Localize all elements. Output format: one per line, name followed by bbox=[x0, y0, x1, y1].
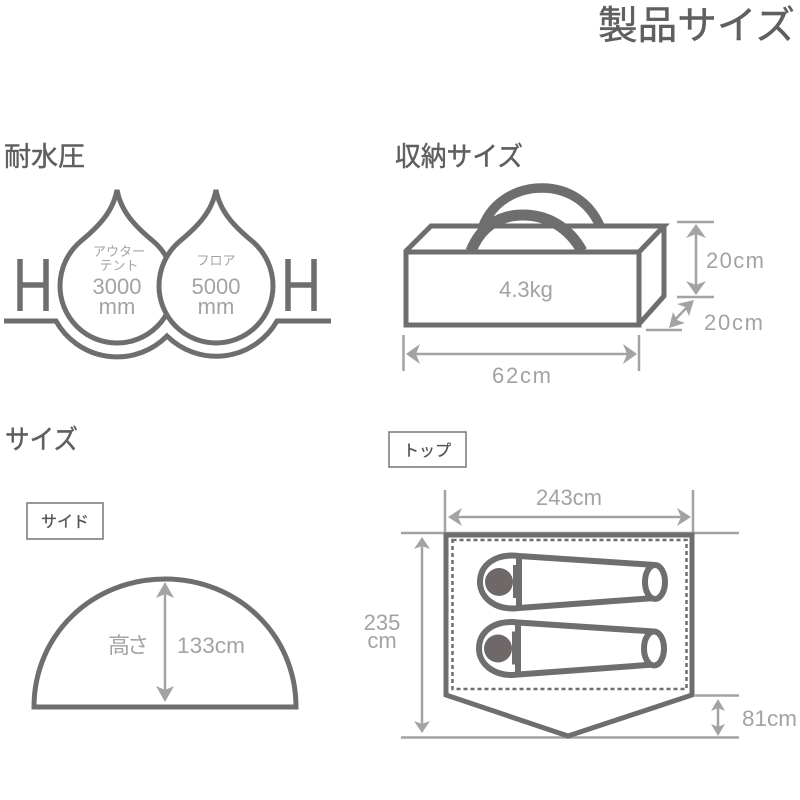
dimension: height bbox=[677, 222, 764, 297]
icon: inner tent dotted outline bbox=[452, 540, 686, 689]
label: top tag bbox=[389, 432, 466, 467]
title: 製品サイズ bbox=[598, 5, 795, 48]
dimension: length arrow: 235 bbox=[364, 610, 400, 635]
icon: sleeping bag lower bbox=[479, 620, 664, 676]
dimension: width: 62cm bbox=[492, 363, 551, 388]
icon: front handle bbox=[471, 215, 582, 251]
panel: water pressure diagram bbox=[4, 190, 331, 357]
dimension: length arrow: cm bbox=[367, 628, 397, 653]
icon: back handle bbox=[483, 188, 600, 226]
icon: bag front bbox=[406, 252, 639, 325]
label: floor: mm bbox=[198, 294, 234, 319]
label: outer tent: 3000 bbox=[93, 274, 141, 299]
icon: letter H right bbox=[288, 259, 314, 311]
icon: sleeping bag upper bbox=[480, 554, 665, 610]
dimension: vestibule arrow: 81cm bbox=[742, 706, 797, 731]
dimension: width bbox=[404, 335, 639, 388]
label: floor: 5000 bbox=[192, 274, 240, 299]
label: weight: 4.3kg bbox=[499, 277, 553, 302]
dimension: width arrow bbox=[448, 485, 691, 526]
label: outer tent: アウター bbox=[93, 244, 145, 259]
panel: top view bbox=[364, 432, 797, 738]
label: side tag bbox=[27, 503, 103, 539]
icon: floor drop bbox=[159, 190, 273, 343]
dimension: height: 20cm bbox=[706, 248, 764, 273]
dimension: vestibule arrow bbox=[711, 699, 797, 736]
dimension: length arrow bbox=[364, 537, 430, 733]
icon: letter H left bbox=[20, 259, 46, 311]
heading: size: サイズ bbox=[5, 425, 78, 455]
label: outer tent: mm bbox=[99, 294, 135, 319]
heading: water pressure: 耐水圧 bbox=[4, 142, 85, 172]
dimension: height arrow bbox=[156, 582, 174, 702]
icon: water line bbox=[4, 321, 331, 357]
icon: outer tent drop bbox=[60, 190, 174, 343]
icon: bag top and side bbox=[406, 226, 664, 323]
label: floor: フロア bbox=[196, 253, 236, 268]
label: outer tent bbox=[93, 244, 145, 319]
dimension: width arrow: 243cm bbox=[536, 485, 602, 510]
label: floor bbox=[192, 253, 240, 319]
dimension: depth: 20cm bbox=[704, 310, 763, 335]
heading: packed size: 収納サイズ bbox=[395, 142, 523, 172]
icon: tent outline bbox=[446, 535, 692, 736]
dimension: reference lines bbox=[401, 490, 739, 738]
label: height word: 高さ bbox=[108, 633, 149, 658]
dimension: depth bbox=[646, 300, 763, 335]
icon: tent dome bbox=[34, 579, 296, 707]
label: outer tent: テント bbox=[99, 258, 139, 273]
label: height value: 133cm bbox=[177, 633, 245, 658]
label: side tag: サイド bbox=[41, 514, 89, 531]
panel: side view bbox=[27, 503, 296, 707]
label: top tag: トップ bbox=[403, 442, 451, 460]
panel: packed size diagram bbox=[404, 188, 764, 388]
